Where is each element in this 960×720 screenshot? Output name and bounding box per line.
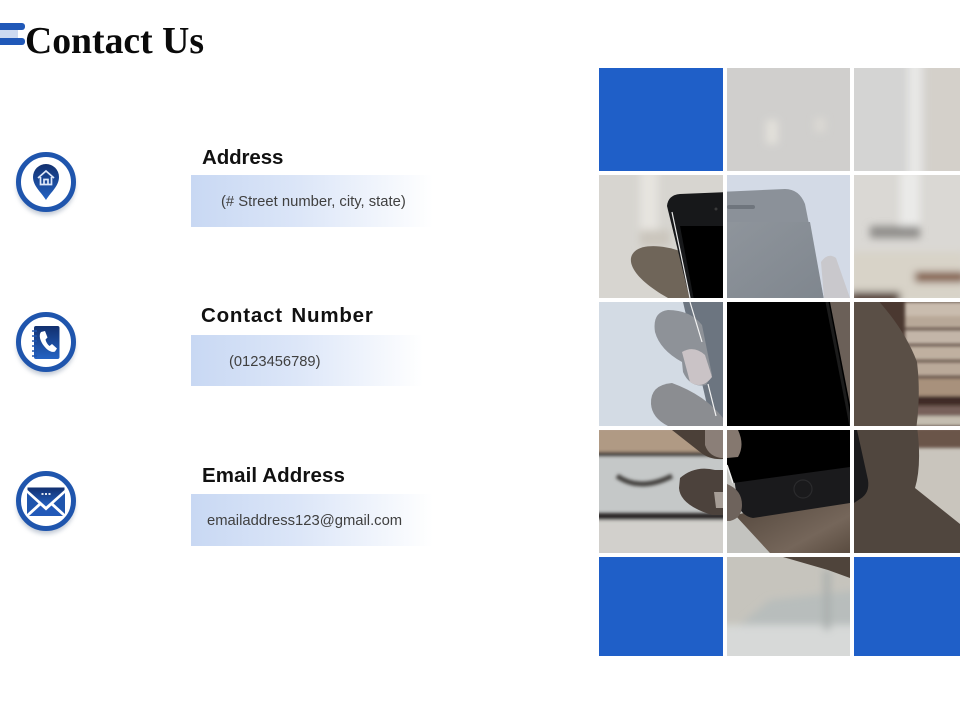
icon: envelope — [14, 471, 78, 536]
band: address — [191, 175, 433, 227]
heading: contact number: Contact Number — [201, 304, 374, 327]
tile: blurred window top centre — [727, 68, 850, 171]
text: address detail: (# Street number, city, state) — [221, 194, 406, 210]
band: contact number — [191, 335, 423, 386]
tile: blue top left — [599, 68, 723, 171]
title accent: stacked bars — [0, 23, 25, 45]
band: email — [191, 494, 433, 546]
tile: palm and shelves right — [850, 298, 960, 430]
heading: email address: Email Address — [202, 464, 345, 487]
icon: phone contact book — [14, 312, 78, 378]
tile: phone bottom and palm centre — [727, 430, 850, 553]
tile: phone top left with finger — [599, 175, 723, 298]
heading: address: Address — [202, 146, 283, 169]
tile: blurred window top right — [854, 68, 960, 171]
icon: location pin with house — [14, 152, 78, 218]
text: email: emailaddress123@gmail.com — [207, 513, 402, 529]
tile: black phone screen centre — [727, 302, 852, 426]
tile: phone corner and wrist right — [854, 430, 960, 553]
tile: blurred floor bottom centre — [727, 557, 850, 656]
tile: blue bottom left — [599, 557, 723, 656]
tile: fingers and blurred desk left — [599, 430, 723, 553]
tile: blue bottom right — [854, 557, 960, 656]
tile: phone top centre translucent — [720, 175, 850, 300]
title: Contact Us — [25, 20, 204, 62]
photo grid: hand holding phone with blue tiles — [599, 68, 960, 656]
text: phone number: (0123456789) — [229, 354, 320, 370]
tile: finger on phone left — [599, 302, 730, 426]
tile: window and sofa right — [854, 175, 960, 298]
